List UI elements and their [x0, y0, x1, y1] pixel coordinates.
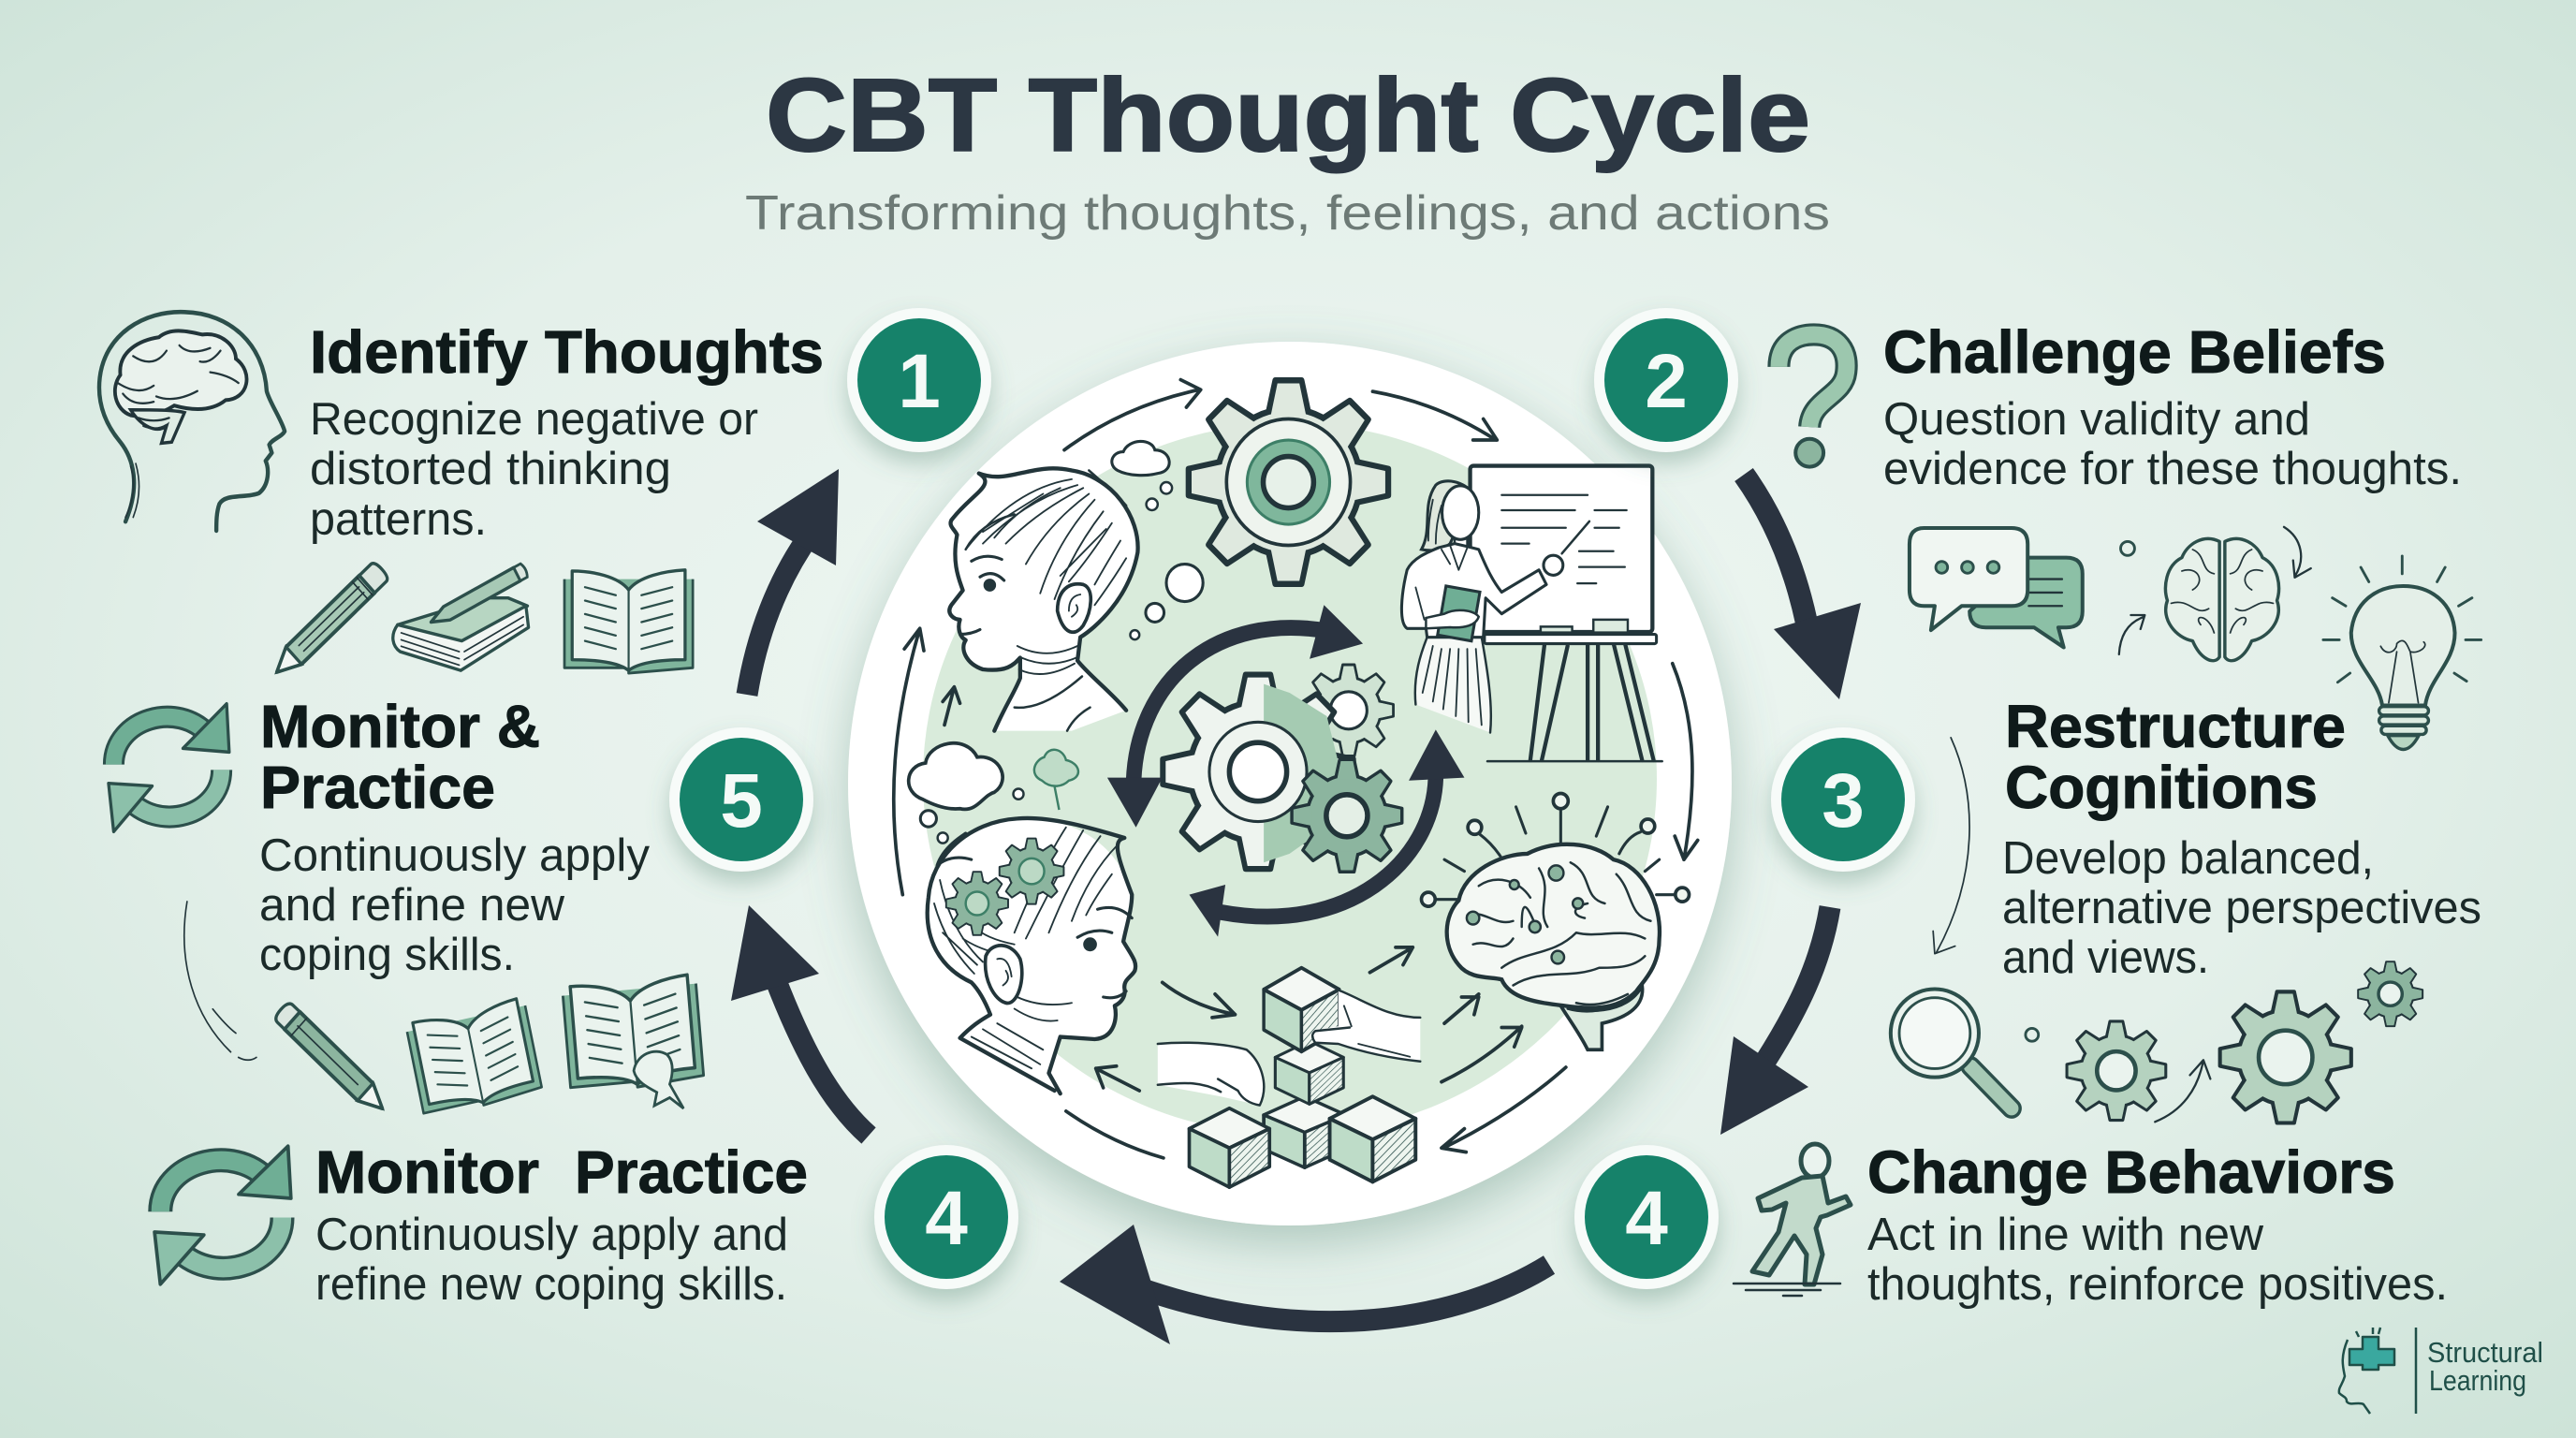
- heading: Monitor: [315, 1138, 539, 1206]
- icon: pencil lower: [273, 1001, 390, 1117]
- icon: question mark: [1778, 334, 1847, 467]
- heading: Identify Thoughts: [310, 318, 824, 386]
- step badge 4 left: [874, 1145, 1018, 1289]
- step badge 4 right: [1574, 1145, 1719, 1289]
- icon: book with pencil: [393, 563, 529, 670]
- body text: Continuously apply: [259, 830, 650, 881]
- body text: [1867, 1210, 2448, 1310]
- logo cross: [2349, 1337, 2394, 1370]
- heading: [315, 1138, 808, 1206]
- central gears: [1163, 665, 1402, 872]
- heading: Cognitions: [2005, 754, 2318, 821]
- panel: restructure cognitions: [2002, 693, 2481, 983]
- body text: Develop balanced,: [2002, 833, 2374, 884]
- building blocks and hands: [1158, 968, 1420, 1187]
- body text: [1883, 394, 2462, 494]
- icon: pencil: [270, 561, 389, 681]
- central circle illustration: [848, 342, 1732, 1225]
- panel: monitor and practice: [259, 693, 650, 980]
- step badge 2: 2: [1645, 339, 1688, 424]
- thought bubbles, top: [1112, 441, 1203, 639]
- outer cycle arrows: [894, 380, 1698, 1158]
- cycle arrow: 5 to 1: [747, 469, 839, 695]
- small curved arrows: [2119, 527, 2311, 654]
- step badge 2: [1594, 308, 1738, 452]
- step badge 1: [847, 308, 991, 452]
- body text: refine new coping skills.: [315, 1259, 787, 1310]
- body text: Recognize negative or: [310, 394, 758, 445]
- panel: monitor practice: [154, 1138, 808, 1310]
- icon: brain top view: [2165, 538, 2279, 661]
- cycle arrow: 2 to 3: [1744, 475, 1861, 699]
- panel: identify thoughts: [99, 312, 824, 1118]
- icon: sync arrows: [109, 704, 229, 831]
- icon: walking person: [1734, 1144, 1851, 1296]
- heading: Monitor &: [260, 693, 540, 760]
- body text: coping skills.: [259, 930, 515, 980]
- icon: light bulb: [2323, 556, 2481, 750]
- icon: head with brain: [99, 312, 285, 531]
- heading: [2005, 693, 2346, 821]
- right hand: [1312, 990, 1420, 1062]
- icon: gears: [2067, 961, 2422, 1123]
- boy thinking, top left: [949, 468, 1138, 731]
- thought clouds, left: [909, 743, 1078, 844]
- heading: Practice: [575, 1138, 808, 1206]
- body text: thoughts, reinforce positives.: [1867, 1259, 2448, 1310]
- logo divider: [2415, 1328, 2417, 1414]
- heading: Change Behaviors: [1867, 1138, 2395, 1206]
- heading: Practice: [260, 754, 495, 821]
- body text: alternative perspectives: [2002, 883, 2481, 933]
- body text: and views.: [2002, 932, 2209, 983]
- body text: [315, 1210, 788, 1310]
- left icons upper: [99, 312, 704, 1118]
- logo: Structural Learning: [2339, 1328, 2543, 1414]
- panel: change behaviors: [1734, 1138, 2448, 1310]
- body text: evidence for these thoughts.: [1883, 444, 2462, 494]
- step badge 5: 5: [720, 758, 763, 844]
- left hand: [1158, 1043, 1264, 1106]
- panel: challenge beliefs: [1778, 318, 2481, 1123]
- subtitle: Transforming thoughts, feelings, and actions: [745, 186, 1830, 241]
- thin curved arrow: [184, 902, 256, 1060]
- right icons: [1778, 334, 2481, 1123]
- boy with gears, bottom left: [928, 818, 1135, 1093]
- teacher and whiteboard: [1401, 466, 1662, 761]
- logo text: Learning: [2429, 1364, 2526, 1397]
- body text: Act in line with new: [1867, 1210, 2264, 1260]
- logo head: [2339, 1328, 2380, 1414]
- icon: chat bubbles: [1910, 528, 2083, 647]
- body text: patterns.: [310, 494, 487, 545]
- body text: [259, 830, 650, 980]
- heading: Restructure: [2005, 693, 2346, 760]
- body text: and refine new: [259, 880, 565, 931]
- central artwork: [894, 380, 1698, 1187]
- central double arrows: [1107, 605, 1464, 937]
- icon: open book lower: [405, 997, 543, 1118]
- icon: magnifying glass: [1891, 990, 2012, 1108]
- green inner disc: [923, 423, 1657, 1135]
- thin curved arrow: [1933, 738, 1969, 954]
- cycle arrow: 4 to 4: [1060, 1225, 1549, 1344]
- icon: small dot: [2121, 541, 2134, 555]
- body text: [310, 394, 758, 545]
- large gear, top: [1189, 380, 1388, 584]
- cycle arrow: 3 to 4: [1720, 907, 1830, 1135]
- icon: sync arrows: [154, 1146, 291, 1284]
- icon: open book: [564, 570, 693, 673]
- step badge 5: [669, 727, 813, 872]
- step badge 3: 3: [1822, 758, 1865, 844]
- step badge 3: [1771, 727, 1915, 872]
- logo text: Structural: [2427, 1336, 2543, 1369]
- body text: [2002, 833, 2481, 983]
- title: CBT Thought Cycle: [766, 58, 1810, 173]
- icon: small dot: [2026, 1028, 2039, 1041]
- icon: open book with hand: [563, 974, 704, 1108]
- step badge 1: 1: [898, 339, 941, 424]
- cycle arrow: 4 to 5: [731, 905, 869, 1136]
- white disc: [848, 342, 1732, 1225]
- body text: distorted thinking: [310, 444, 671, 494]
- heading: Challenge Beliefs: [1883, 318, 2386, 386]
- body text: Question validity and: [1883, 394, 2310, 445]
- step badge 4 left: 4: [925, 1176, 968, 1261]
- step badge 4 right: 4: [1625, 1176, 1668, 1261]
- neural brain: [1422, 794, 1690, 1049]
- body text: Continuously apply and: [315, 1210, 788, 1260]
- heading: [260, 693, 540, 821]
- logo text: [2427, 1336, 2543, 1397]
